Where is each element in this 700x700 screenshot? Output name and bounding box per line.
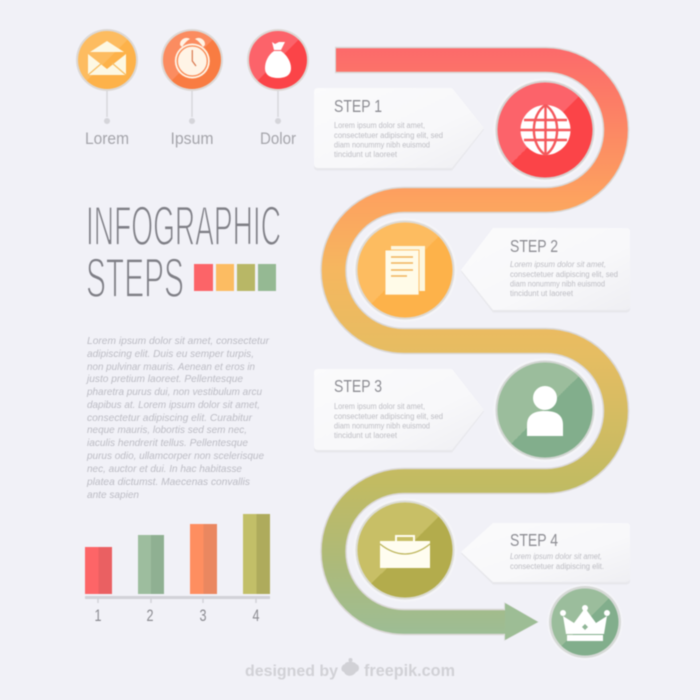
panel: step 4 [461, 523, 630, 584]
footer credit: designed by [245, 663, 338, 680]
icon: envelope, Lorem [76, 29, 138, 148]
panel: step 4: STEP 4 [510, 530, 558, 550]
panel: step 2: diam nonummy nibh euismod [510, 280, 605, 288]
body paragraph: non pulvinar mauris. Aenean et eros in [87, 361, 255, 373]
panel: step 3: tincidunt ut laoreet [334, 431, 398, 440]
body paragraph: Lorem ipsum dolor sit amet, consectetur [87, 335, 269, 347]
title: INFOGRAPHIC [86, 194, 281, 257]
panel: step 4: consectetuer adipiscing elit. [510, 562, 604, 571]
body paragraph: purus odio, ullamcorper non scelerisque [86, 450, 264, 462]
panel: step 1: consectetuer adipiscing elit, sed [334, 131, 443, 140]
panel: step 2: STEP 2 [510, 236, 558, 256]
title [86, 194, 281, 309]
icon: alarm clock, Ipsum [161, 29, 223, 148]
panel: step 3: diam nonummy nibh euismod [334, 422, 430, 430]
body paragraph: platea dictumst. Maecenas convallis [86, 476, 251, 488]
panel: step 2: Lorem ipsum dolor sit amet, [510, 260, 606, 269]
panel: step 3: STEP 3 [334, 376, 382, 396]
panel: step 2 [461, 228, 630, 312]
panel: step 3 [314, 369, 484, 452]
panel: step 4: Lorem ipsum dolor sit amet, [510, 552, 602, 561]
body paragraph: ante sapien [87, 489, 139, 501]
panel: step 2: tincidunt ut laoreet [510, 289, 574, 298]
footer credit: freepik.com [364, 662, 455, 680]
winding ribbon arrow [334, 60, 616, 641]
panel: step 3: Lorem ipsum dolor sit amet, [334, 402, 425, 411]
body paragraph: adipiscing elit. Duis eu semper turpis, [87, 348, 254, 360]
body paragraph [85, 335, 269, 501]
icon: money bag, Dolor: Dolor [260, 129, 296, 148]
title: STEPS [86, 246, 184, 309]
bar chart: 4 [252, 606, 260, 625]
footer credit [245, 658, 455, 680]
icon: crown, goal [547, 584, 623, 660]
panel: step 1: tincidunt ut laoreet [334, 150, 398, 159]
panel: step 1 [314, 88, 484, 170]
body paragraph: nec, auctor et dui. In hac habitasse [87, 463, 242, 475]
body paragraph: neque mauris, lobortis sed sem nec, [87, 424, 247, 436]
body paragraph: justo pretium laoreet. Pellentesque [85, 373, 243, 385]
icon: globe, step 1 [493, 78, 597, 182]
top icon row [76, 29, 309, 148]
panel: step 1: STEP 1 [334, 96, 382, 116]
body paragraph: iaculis hendrerit tellus. Pellentesque [87, 437, 248, 449]
icon: envelope, Lorem: Lorem [85, 129, 129, 148]
icon: freepik logo [341, 658, 359, 676]
bar chart [85, 514, 270, 625]
icon: briefcase, step 4 [353, 498, 457, 602]
panel: step 1: diam nonummy nibh euismod [334, 140, 430, 150]
body paragraph: dapibus at. Lorem ipsum dolor sit amet, [87, 399, 260, 411]
colour legend squares [194, 264, 276, 291]
bar chart: 3 [200, 606, 206, 625]
body paragraph: pharetra purus dui, non vestibulum arcu [86, 386, 262, 398]
bar chart: 2 [146, 606, 154, 625]
body paragraph: consectetur adipiscing elit. Curabitur [87, 412, 252, 424]
panel: step 1: Lorem ipsum dolor sit amet, [334, 121, 425, 130]
panel: step 2: consectetuer adipiscing elit, sed [510, 270, 618, 279]
icon: money bag, Dolor [247, 29, 309, 148]
icon: alarm clock, Ipsum: Ipsum [170, 129, 214, 148]
bar chart: 1 [94, 606, 102, 625]
icon: person, step 3 [493, 358, 597, 462]
panel: step 3: consectetuer adipiscing elit, sed [334, 412, 443, 421]
icon: documents, step 2 [353, 218, 457, 322]
